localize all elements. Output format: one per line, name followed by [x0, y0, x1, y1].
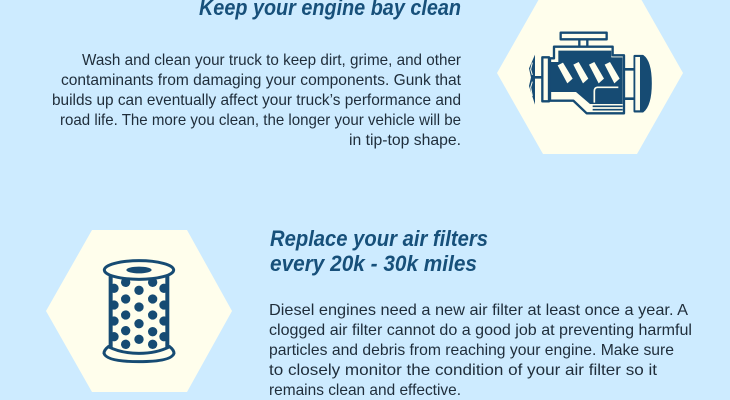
text block: air filter description: to closely monitor the condition of your air filter so it [269, 362, 658, 379]
text block: engine bay description: Wash and clean your truck to keep dirt, grime, and other [82, 52, 462, 69]
heading: replace your air filters: Replace your air filters [270, 226, 488, 251]
text block: engine bay description: contaminants from damaging your components. Gunk that [61, 72, 462, 89]
text block: engine bay description: in tip-top shape. [349, 132, 461, 149]
heading: replace your air filters: every 20k - 30k miles [270, 251, 477, 276]
text block: engine bay description: builds up can eventually affect your truck’s performance and [52, 92, 461, 109]
text block: air filter description: remains clean and effective. [269, 382, 461, 399]
panel: engine bay tip [52, 0, 683, 154]
icon: engine in hexagon [497, 0, 683, 154]
text block: engine bay description: road life. The more you clean, the longer your vehicle will be [60, 112, 461, 129]
text block: air filter description [269, 302, 692, 399]
heading: replace your air filters [270, 226, 488, 276]
panel: air filter tip [46, 226, 692, 399]
text block: air filter description: particles and debris from reaching your engine. Make sure [269, 342, 674, 359]
text block: air filter description: clogged air filter cannot do a good job at preventing harmful [269, 322, 692, 339]
text block: engine bay description [52, 52, 462, 149]
text block: air filter description: Diesel engines need a new air filter at least once a year. A [269, 302, 688, 319]
icon: air filter in hexagon [46, 230, 232, 392]
